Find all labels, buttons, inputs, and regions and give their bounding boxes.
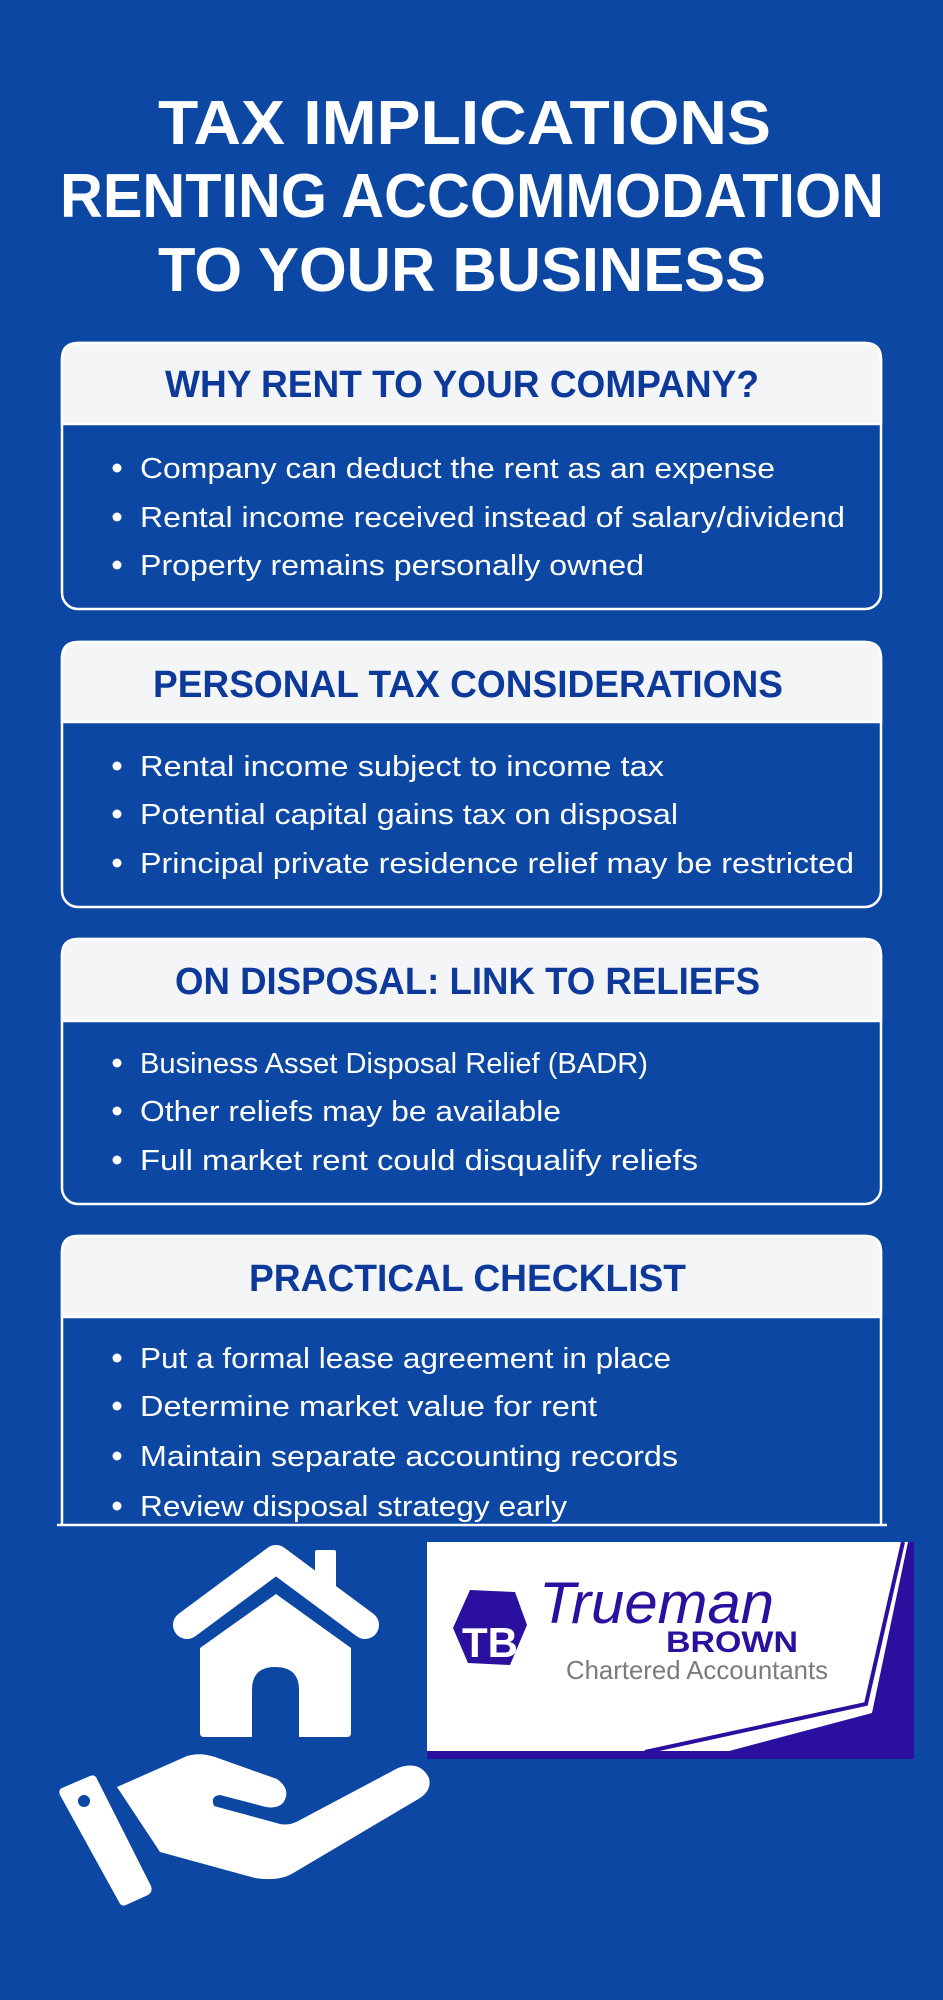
panel: on disposal link to reliefs <box>62 939 881 1204</box>
bullet list: checklist: Determine market value for rent <box>140 1391 597 1423</box>
icon: house in hand <box>59 1550 430 1906</box>
icon: house <box>187 1550 365 1737</box>
bullet list: why rent: Property remains personally owned <box>140 550 644 582</box>
heading: on disposal: ON DISPOSAL: LINK TO RELIEFS <box>175 961 760 1003</box>
title: TAX IMPLICATIONS <box>158 89 771 158</box>
bullet list: reliefs: Business Asset Disposal Relief (BADR) <box>140 1048 648 1080</box>
panel: why rent to your company <box>62 343 881 609</box>
logo: Trueman Brown: BROWN <box>666 1626 798 1659</box>
logo mark: TB hexagon <box>453 1590 527 1666</box>
bullet list: reliefs: Other reliefs may be available <box>140 1096 561 1128</box>
bullet list: reliefs <box>112 1048 698 1177</box>
bullet list: personal tax: Potential capital gains tax on disposal <box>140 799 678 831</box>
bullet list: checklist <box>112 1343 678 1523</box>
bullet list: personal tax: Principal private residence relief may be restricted <box>140 848 854 880</box>
icon: hand <box>59 1754 430 1906</box>
title: RENTING ACCOMMODATION <box>60 162 884 231</box>
bullet list: checklist: Put a formal lease agreement in place <box>140 1343 671 1375</box>
heading: why rent: WHY RENT TO YOUR COMPANY? <box>165 364 759 406</box>
title <box>60 89 884 305</box>
bullet list: why rent <box>112 453 845 582</box>
title: TO YOUR BUSINESS <box>158 236 766 305</box>
panel: practical checklist <box>57 1236 887 1525</box>
bullet list: why rent: Rental income received instead of salary/dividend <box>140 502 845 534</box>
bullet list: reliefs: Full market rent could disqualify reliefs <box>140 1145 698 1177</box>
bullet list: personal tax: Rental income subject to income tax <box>140 751 665 783</box>
bullet list: checklist: Review disposal strategy early <box>140 1491 568 1523</box>
logo text: Trueman <box>539 1571 774 1636</box>
bullet list: personal tax <box>112 751 854 880</box>
logo mark: TB hexagon: TB <box>462 1619 518 1666</box>
panel: personal tax considerations <box>62 642 881 907</box>
bullet list: why rent: Company can deduct the rent as an expense <box>140 453 775 485</box>
heading: personal tax: PERSONAL TAX CONSIDERATIONS <box>153 664 783 706</box>
heading: checklist: PRACTICAL CHECKLIST <box>249 1258 686 1300</box>
logo: Trueman Brown: Chartered Accountants <box>566 1655 828 1685</box>
bullet list: checklist: Maintain separate accounting records <box>140 1441 678 1473</box>
logo: Trueman Brown <box>427 1542 914 1759</box>
